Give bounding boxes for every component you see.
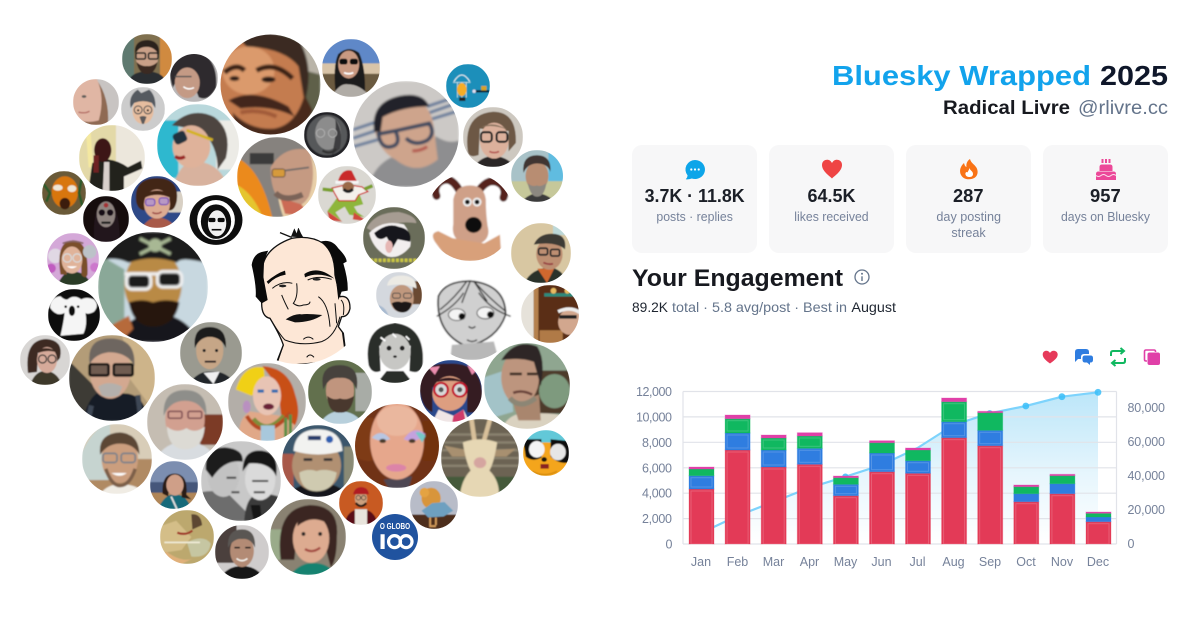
icon: heart (822, 160, 842, 178)
month labels: Jul (910, 555, 925, 569)
icon: reposts arrows (1111, 348, 1125, 366)
stat value: 64.5K (808, 185, 856, 206)
month labels (691, 555, 1109, 569)
profile name and handle: @rlivre.cc (1078, 98, 1168, 119)
heading: Your Engagement: Your Engagement (632, 265, 843, 292)
month labels: Sep (979, 555, 1001, 569)
avatar: O Globo 100 logo: O GLOBO (380, 522, 410, 531)
chart grid (683, 392, 1116, 544)
stat value: 287 (953, 185, 984, 206)
bar: Jun (870, 441, 894, 544)
avatar: bald man with orange sunglasses (237, 137, 317, 217)
bar: Jan (689, 467, 714, 544)
bar: Aug (942, 398, 967, 544)
avatar: bearded man in front of fence (511, 150, 564, 202)
avatar: Jake the dog with glasses (523, 430, 569, 476)
avatar: man with curly hair and beard (308, 360, 372, 424)
month labels: Nov (1051, 555, 1074, 569)
avatar: woman with long hair, side face (73, 79, 119, 125)
avatar: woman with glasses, wavy hair (463, 107, 523, 167)
avatar: big close-up bearded man (220, 34, 320, 134)
left axis labels: 0 (666, 538, 672, 552)
right axis labels (1128, 401, 1165, 551)
icon: birthday cake (1096, 159, 1116, 180)
title: 2025 (1100, 60, 1168, 91)
avatar: woman with dark hair (20, 335, 70, 385)
stat label: day posting (936, 210, 1001, 224)
left axis labels (636, 385, 672, 552)
avatar: curly haired woman (170, 53, 218, 102)
avatar: blue cage logo (446, 64, 490, 108)
avatar: man with grey moustache and band shirt (69, 335, 155, 421)
cumulative line (701, 389, 1101, 533)
month labels: Oct (1016, 555, 1036, 569)
engagement summary: 89.2K (632, 299, 669, 315)
right axis labels: 80,000 (1128, 401, 1165, 415)
profile name and handle: Radical Livre (943, 98, 1070, 119)
bar: Feb (725, 415, 750, 544)
panel: posts and replies (632, 145, 757, 253)
icon: chat bubble (685, 160, 705, 179)
avatar: older man with white beard (147, 384, 223, 460)
stat value: 957 (1090, 185, 1121, 206)
avatar: vintage portrait man (180, 322, 242, 384)
avatar: grayscale bald man (304, 112, 350, 158)
avatar: man in pirate hat with white sunglasses (98, 232, 208, 342)
panel: day posting streak (906, 145, 1031, 253)
bar: Oct (1014, 485, 1039, 544)
avatar: man with red hat (339, 481, 383, 525)
avatar: woman with headphones (46, 233, 100, 285)
avatar: curly woman with purple glasses (131, 176, 184, 228)
avatar: Cyndi Lauper with yellow and orange hair (228, 363, 306, 441)
avatar: Gromit figure (432, 176, 509, 261)
right axis labels: 0 (1128, 537, 1134, 551)
title (832, 60, 1168, 91)
avatar: man in white cap, bearded caricature (282, 425, 354, 497)
avatar: woman at the beach (150, 461, 198, 509)
avatar: smiling man in black shirt (215, 525, 269, 579)
avatar: skull makeup woman (83, 196, 129, 242)
avatar: man with beard stubble in a car (484, 343, 570, 429)
icon: replies chat (1075, 349, 1093, 365)
profile name and handle (943, 98, 1168, 119)
bar: May (833, 476, 858, 544)
stat label: posts · replies (656, 210, 733, 224)
avatar: woman with sunglasses and blue sky (322, 39, 380, 97)
avatar: black and white cat with meme caption (363, 207, 425, 269)
panel: day posting streak: streak (951, 226, 986, 240)
avatar: man with glasses (122, 34, 172, 84)
avatar: chick in blue skirt (410, 481, 458, 529)
engagement summary: August (851, 299, 896, 315)
right axis labels: 40,000 (1128, 469, 1165, 483)
month labels: Feb (727, 555, 748, 569)
engagement summary: total · 5.8 avg/post · Best in (672, 299, 847, 315)
avatar: woman with pastel eye makeup (347, 402, 449, 488)
stat label: likes received (794, 210, 869, 224)
avatar: black and white afro logo (190, 195, 242, 245)
engagement summary (632, 299, 896, 315)
chart legend (1043, 348, 1160, 366)
bar: Mar (761, 435, 786, 544)
month labels: Aug (942, 555, 965, 569)
month labels: Dec (1087, 555, 1109, 569)
month labels: Jan (691, 555, 711, 569)
avatar: woman in cap and glasses (511, 223, 571, 283)
stacked bar chart with cumulative line (636, 385, 1165, 569)
avatar: O Globo 100 logo (372, 514, 418, 560)
avatar: woman with long brown hair (270, 499, 346, 575)
left axis labels: 2,000 (642, 512, 672, 526)
avatar: woman with yellow sunglasses (157, 104, 241, 186)
right axis labels: 60,000 (1128, 435, 1165, 449)
cumulative area fill (701, 392, 1098, 544)
month labels: May (834, 555, 858, 569)
bar: Dec (1086, 512, 1111, 544)
avatar cluster (20, 33, 581, 579)
right axis labels: 20,000 (1128, 503, 1165, 517)
avatar: man on striped pillow (353, 81, 459, 187)
icon: info (855, 270, 869, 284)
icon: quotes copy (1144, 350, 1160, 365)
panel: likes received (769, 145, 894, 253)
left axis labels: 4,000 (642, 487, 672, 501)
avatar: man in white cap and glasses (376, 272, 422, 318)
month labels: Mar (763, 555, 784, 569)
bar: Nov (1050, 474, 1075, 544)
avatar: black and white photo of two men (201, 441, 281, 521)
title: Bluesky Wrapped (832, 60, 1091, 91)
avatar: cartoon girl with red glasses (420, 360, 482, 422)
avatar: jack-o-lantern mask (42, 171, 86, 215)
avatar: person in wooden bar (521, 285, 581, 343)
panel: days on Bluesky (1043, 145, 1168, 253)
left axis labels: 10,000 (636, 410, 672, 424)
avatar: smiling man with glasses in cathedral (82, 424, 152, 494)
bar: Apr (797, 433, 822, 544)
avatar: black and white drawn girl (365, 323, 425, 383)
left axis labels: 12,000 (636, 385, 672, 399)
month labels: Apr (800, 555, 819, 569)
avatar: koala logo (48, 289, 100, 341)
left axis labels: 6,000 (642, 461, 672, 475)
avatar: white goat (441, 419, 519, 497)
icon: flame (960, 159, 978, 179)
avatar: puppy with caption (160, 510, 214, 564)
avatar: grinch elf sticker (318, 166, 376, 224)
avatar: memoji man (121, 87, 165, 131)
avatar: central cartoon of balding man (252, 227, 350, 367)
month labels: Jun (871, 555, 892, 569)
stat label: days on Bluesky (1061, 210, 1151, 224)
bar: Sep (978, 411, 1003, 544)
bar: Jul (906, 448, 930, 544)
avatar: Darth Vader costume (79, 125, 145, 191)
left axis labels: 8,000 (642, 436, 672, 450)
icon: likes heart (1043, 351, 1058, 364)
avatar: gray cartoon child sketch (436, 279, 512, 360)
stat value: 3.7K · 11.8K (645, 185, 745, 206)
